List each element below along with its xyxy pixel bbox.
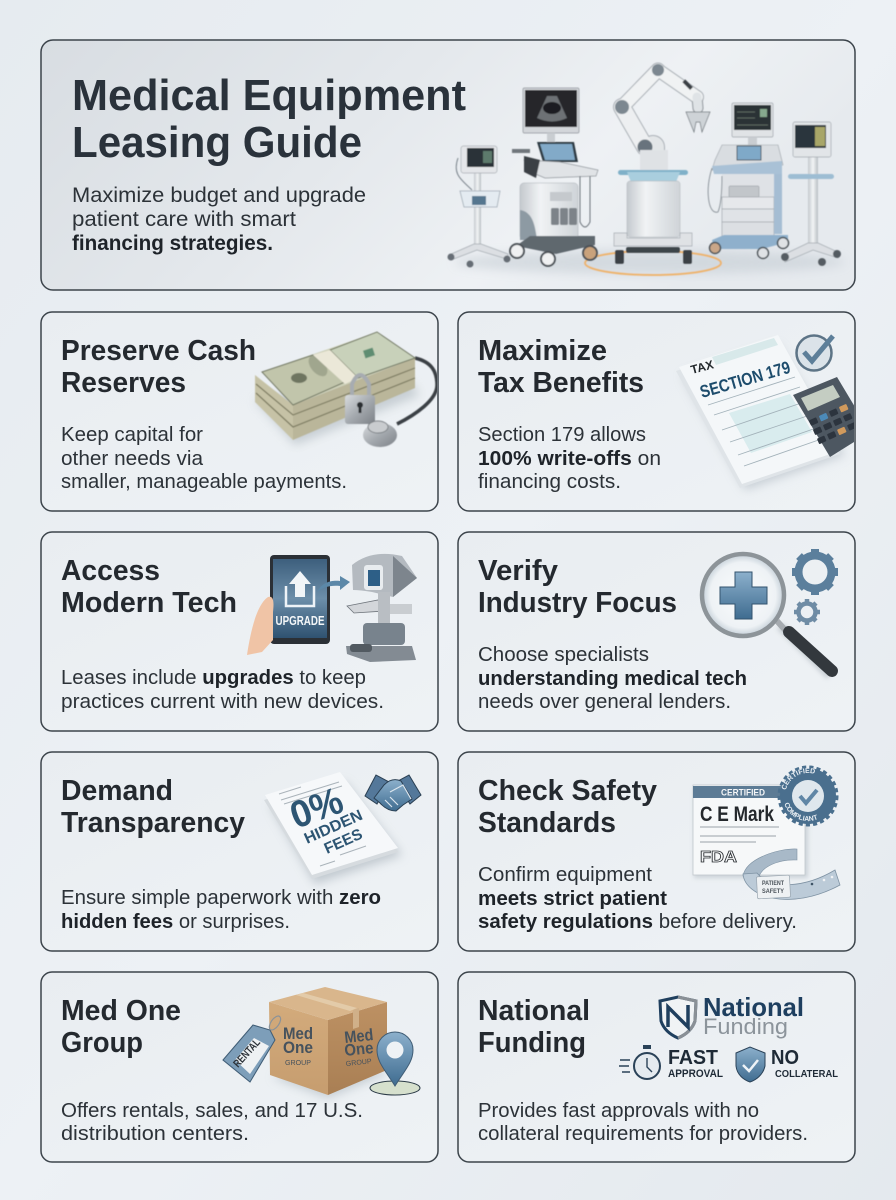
panel: check safety standards [457, 751, 856, 952]
patient wristband: SAFETY [762, 889, 784, 895]
icon: tax form with calculator and check: SECTION 179 [698, 357, 793, 402]
body text: Leases include upgrades to keep [61, 667, 366, 689]
heading [61, 335, 256, 399]
heading: Funding [478, 1027, 586, 1059]
icon: tax form with calculator and check: TAX [689, 357, 715, 377]
subtitle: patient care with smart [72, 208, 296, 231]
body text: Keep capital for [61, 424, 203, 446]
icon: robotic arm cart [614, 64, 710, 264]
icon: certificate with badge and wristband: CERTIFIED [721, 788, 765, 798]
panel: hero header [41, 40, 855, 290]
body text: safety regulations before delivery. [478, 911, 797, 933]
body text [61, 887, 381, 933]
icon: cardboard box with rental tag and pin: One [344, 1039, 374, 1060]
badge: no collateral: NO [771, 1047, 799, 1069]
tablet [270, 555, 330, 644]
heading: Modern Tech [61, 587, 237, 619]
body text: collateral requirements for providers. [478, 1123, 808, 1145]
panel: demand transparency [41, 752, 438, 951]
body text: other needs via [61, 448, 204, 470]
panel: access modern tech [41, 532, 438, 731]
icon: tax form with calculator and check [676, 335, 870, 490]
body text: practices current with new devices. [61, 691, 384, 713]
icon: magnifying glass over medical cross with gears [702, 549, 838, 676]
certified seal: CERTIFIED [782, 768, 815, 790]
badge: no collateral: COLLATERAL [775, 1068, 839, 1080]
icon: equipment cart with drawers [708, 103, 788, 258]
certified seal: COMPLIANT [784, 802, 817, 822]
heading: Med One [61, 995, 181, 1027]
logo: national funding: National [703, 992, 804, 1022]
heading: Verify [478, 555, 558, 587]
illustration: medical equipment line-up [448, 64, 845, 275]
heading: Tax Benefits [478, 367, 644, 399]
body text [478, 864, 797, 933]
logo: national funding [660, 992, 804, 1039]
heading: Check Safety [478, 775, 657, 807]
badge: fast approval: APPROVAL [668, 1068, 723, 1080]
icon: certificate with badge and wristband: FDA [700, 849, 737, 866]
heading: Standards [478, 807, 616, 839]
panel: national funding [458, 972, 855, 1162]
heading: Group [61, 1027, 143, 1059]
icon: cardboard box with rental tag and pin [223, 987, 420, 1098]
icon: certificate with badge and wristband: C E Mark [700, 803, 774, 826]
body text [478, 424, 661, 493]
body text: distribution centers. [61, 1123, 249, 1145]
rental tag [223, 1014, 283, 1082]
tablet: UPGRADE [276, 614, 324, 628]
panel: verify industry focus [458, 532, 855, 731]
title: Medical Equipment [72, 71, 466, 120]
body text [478, 1100, 808, 1145]
subtitle: Maximize budget and upgrade [72, 184, 366, 207]
body text: Provides fast approvals with no [478, 1100, 759, 1122]
body text: Ensure simple paperwork with zero [61, 887, 381, 909]
title [72, 71, 466, 167]
icon: patient monitor on stand [448, 146, 510, 268]
icon: zero hidden fees document: HIDDEN [302, 807, 365, 848]
icon: cardboard box with rental tag and pin: GROUP [285, 1060, 311, 1067]
heading: Transparency [61, 807, 245, 839]
icon: zero hidden fees document: FEES [322, 826, 365, 858]
badge: fast approval: FAST [668, 1047, 718, 1069]
heading: Preserve Cash [61, 335, 256, 367]
patient wristband: PATIENT [762, 881, 784, 887]
icon: cardboard box with rental tag and pin: GROUP [345, 1058, 372, 1068]
icon: cardboard box with rental tag and pin: Med [344, 1026, 374, 1047]
heading [478, 775, 657, 839]
body text [61, 424, 347, 493]
body text: 100% write-offs on [478, 448, 661, 470]
heading [61, 555, 237, 619]
subtitle: financing strategies. [72, 232, 273, 255]
logo: national funding: Funding [703, 1014, 788, 1039]
panel: med one group [41, 972, 438, 1162]
heading: Reserves [61, 367, 186, 399]
body text: needs over general lenders. [478, 691, 731, 713]
heading: Demand [61, 775, 173, 807]
heading [478, 335, 644, 399]
icon: bedside monitor on pole [781, 122, 841, 266]
icon: cash stack with padlock and stethoscope [255, 332, 437, 447]
panel: preserve cash reserves [41, 312, 438, 511]
icon: handshake [365, 775, 421, 811]
panel: maximize tax benefits [458, 312, 870, 511]
subtitle [72, 184, 366, 255]
icon: ultrasound machine [510, 88, 598, 266]
small gear [794, 599, 820, 625]
icon: zero hidden fees document [264, 772, 402, 884]
heading [478, 555, 677, 619]
body text: understanding medical tech [478, 668, 747, 690]
large gear [792, 549, 838, 595]
surgical device [346, 554, 417, 662]
icon: upgrade tablet and robotic device [247, 554, 417, 662]
body text [61, 667, 384, 713]
heading: Access [61, 555, 160, 587]
body text: smaller, manageable payments. [61, 471, 347, 493]
heading [478, 995, 590, 1059]
body text: Section 179 allows [478, 424, 646, 446]
icon: zero hidden fees document: 0% [285, 780, 349, 837]
body text: meets strict patient [478, 888, 667, 910]
heading: National [478, 995, 590, 1027]
body text [61, 1100, 363, 1145]
badge: no collateral [736, 1047, 839, 1082]
badge: fast approval [619, 1045, 723, 1080]
body text: hidden fees or surprises. [61, 911, 290, 933]
heading: Maximize [478, 335, 607, 367]
body text: Offers rentals, sales, and 17 U.S. [61, 1100, 363, 1122]
patient wristband [743, 849, 840, 899]
certified seal [778, 766, 838, 826]
rental tag: RENTAL [231, 1037, 263, 1070]
icon: cardboard box with rental tag and pin: One [283, 1039, 313, 1057]
icon: cardboard box with rental tag and pin: Med [283, 1025, 313, 1043]
body text: Choose specialists [478, 644, 649, 666]
body text [478, 644, 747, 713]
heading: Industry Focus [478, 587, 677, 619]
body text: Confirm equipment [478, 864, 652, 886]
location pin [370, 1032, 420, 1095]
heading [61, 995, 181, 1059]
icon: certificate with badge and wristband [692, 766, 840, 900]
heading [61, 775, 245, 839]
title: Leasing Guide [72, 118, 362, 167]
body text: financing costs. [478, 471, 621, 493]
